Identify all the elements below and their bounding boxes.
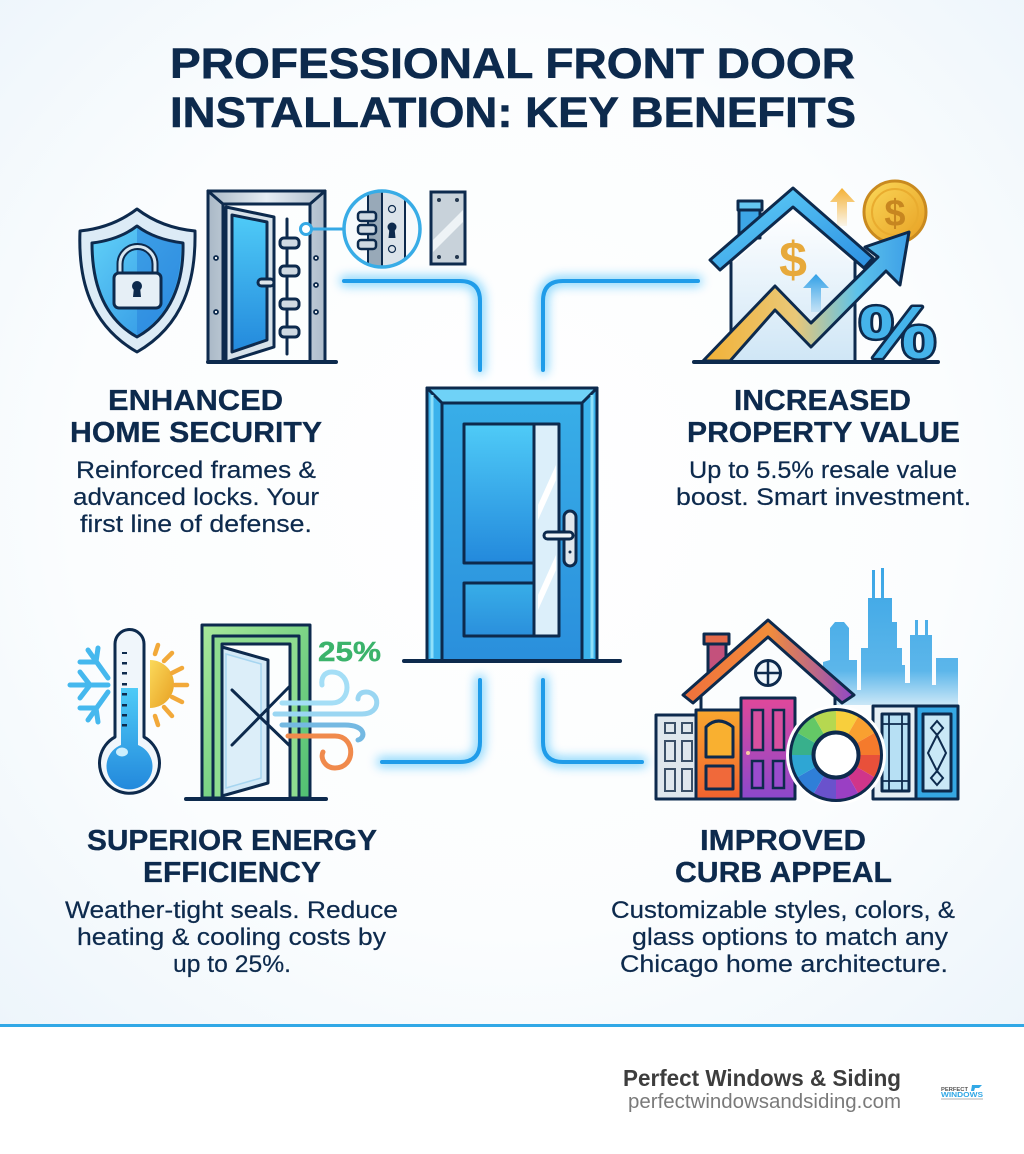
description: Reinforced frames & <box>76 457 316 484</box>
text block: increased property value <box>676 385 971 511</box>
gold coin <box>864 181 926 243</box>
colour wheel <box>786 705 886 805</box>
snowflake <box>70 648 108 722</box>
logo: WINDOWS <box>941 1092 983 1099</box>
description <box>65 897 398 978</box>
dollar sign: $ <box>779 232 807 288</box>
pink door <box>741 698 795 799</box>
description: advanced locks. Your <box>73 484 319 511</box>
description <box>611 897 955 978</box>
glass panel door <box>873 706 916 799</box>
white door <box>656 715 696 799</box>
text block: improved curb appeal <box>611 825 955 978</box>
logo <box>941 1085 983 1099</box>
lower door panel <box>464 583 534 636</box>
door glass strip <box>534 424 559 636</box>
description <box>73 457 319 538</box>
website: perfectwindowsandsiding.com <box>628 1091 901 1113</box>
round attic window <box>756 660 780 686</box>
heading: EFFICIENCY <box>143 857 321 889</box>
gold up arrow <box>830 188 855 226</box>
heading: PROPERTY VALUE <box>687 417 960 449</box>
small blue up arrow <box>803 274 829 312</box>
icon: house with door styles and colour wheel <box>656 620 958 805</box>
description: Customizable styles, colors, & <box>611 897 955 924</box>
roof <box>710 188 873 270</box>
thermometer <box>100 630 160 793</box>
heading: IMPROVED <box>700 825 866 857</box>
heading <box>675 825 892 889</box>
connector: bottom left <box>382 680 480 762</box>
sun <box>150 645 187 725</box>
description: up to 25%. <box>173 951 291 978</box>
footer <box>0 1024 1024 1154</box>
stained glass door <box>916 706 958 799</box>
roof <box>683 620 854 703</box>
door handle <box>544 511 576 566</box>
icon: steel strike plate <box>431 192 465 264</box>
25 percent label: 25% <box>318 636 381 667</box>
description: Chicago home architecture. <box>620 951 948 978</box>
heading <box>687 385 960 449</box>
connector: bottom right <box>543 680 642 762</box>
wind lines <box>275 672 377 768</box>
icon: central front door <box>404 388 620 661</box>
percent sign: % <box>859 291 936 374</box>
rising chart arrow <box>703 232 909 361</box>
description: glass options to match any <box>632 924 948 951</box>
text block: superior energy efficiency <box>65 825 398 978</box>
description: Weather-tight seals. Reduce <box>65 897 398 924</box>
connector: top right <box>543 281 698 370</box>
chimney <box>704 634 729 672</box>
icon: thermometer with snowflake and sun <box>70 630 187 793</box>
title: INSTALLATION: KEY BENEFITS <box>170 89 856 137</box>
logo: PERFECT <box>941 1087 968 1093</box>
text block: enhanced home security <box>70 385 322 538</box>
icon: house value with rising arrow <box>694 181 938 374</box>
heading <box>70 385 322 449</box>
heading: HOME SECURITY <box>70 417 322 449</box>
icon: lock detail magnifier <box>300 185 420 270</box>
heading: INCREASED <box>734 385 911 417</box>
description: heating & cooling costs by <box>77 924 386 951</box>
description: boost. Smart investment. <box>676 484 971 511</box>
title <box>170 40 856 137</box>
description: Up to 5.5% resale value <box>689 457 957 484</box>
company name: Perfect Windows & Siding <box>623 1065 901 1091</box>
gold coin: $ <box>884 193 906 235</box>
crossed-out draft <box>232 686 290 746</box>
icon: weather-sealed door <box>186 625 381 799</box>
chimney <box>738 201 762 238</box>
house body <box>731 210 855 362</box>
icon: shield with padlock <box>80 209 195 352</box>
heading: CURB APPEAL <box>675 857 892 889</box>
title: PROFESSIONAL FRONT DOOR <box>170 40 855 88</box>
description <box>676 457 971 511</box>
orange door <box>696 710 741 799</box>
heading: SUPERIOR ENERGY <box>87 825 377 857</box>
house body <box>700 630 835 720</box>
heading <box>87 825 377 889</box>
description: first line of defense. <box>80 511 312 538</box>
icon: reinforced door frame <box>208 191 336 362</box>
heading: ENHANCED <box>108 385 283 417</box>
connector: top left <box>344 281 480 370</box>
upper door panel <box>464 424 534 563</box>
icon: Chicago skyline <box>823 568 958 705</box>
lock bolts <box>280 238 299 337</box>
